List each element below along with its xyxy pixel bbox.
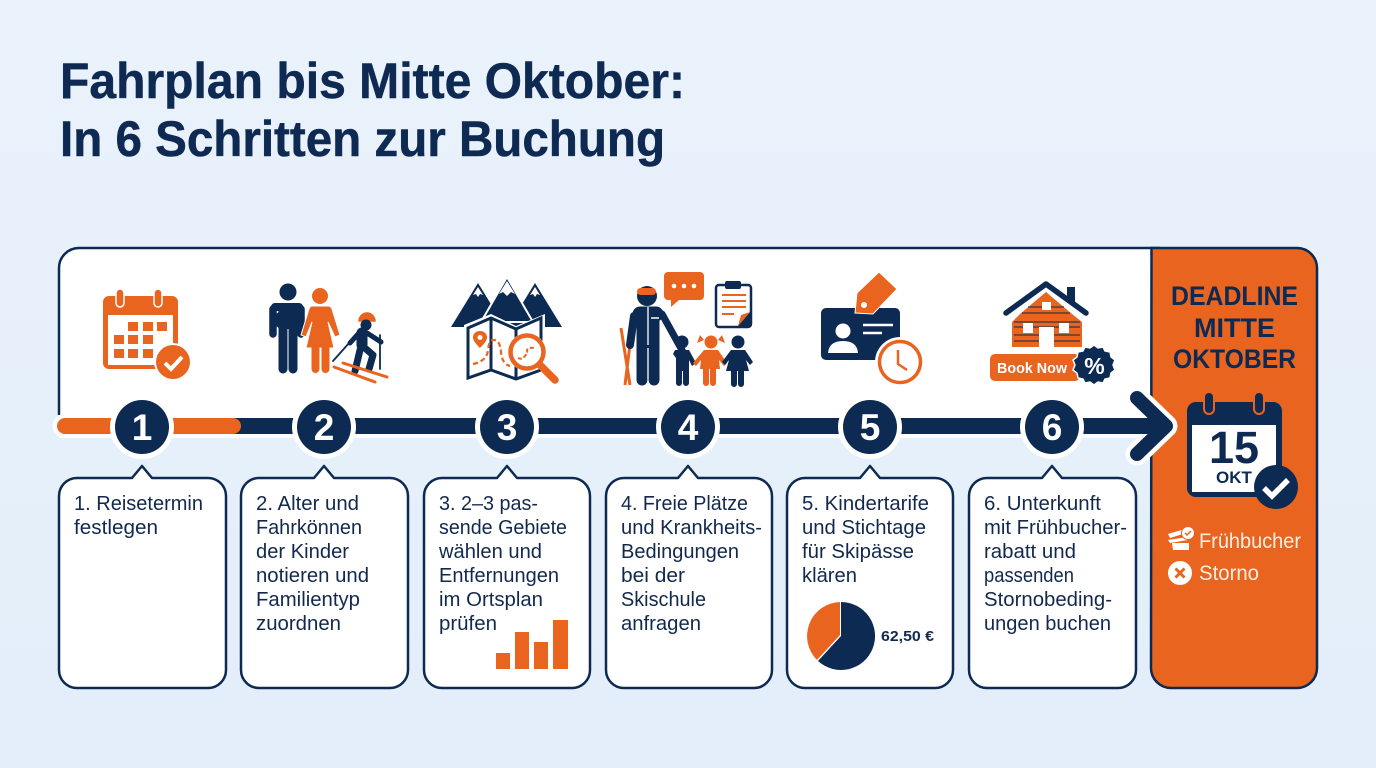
text: step 2: 2. Alter und bbox=[256, 493, 359, 515]
title: Fahrplan bis Mitte Oktober: bbox=[60, 53, 685, 109]
marker 2 bbox=[292, 395, 356, 459]
deadline heading: DEADLINE bbox=[1171, 281, 1298, 311]
icon: early booking bbox=[1168, 526, 1194, 550]
chart: pie bbox=[807, 602, 935, 670]
title: In 6 Schritten zur Buchung bbox=[60, 111, 665, 167]
text: step 2: Familientyp bbox=[256, 589, 360, 611]
text: step 6 bbox=[984, 493, 1127, 635]
text: step 2: der Kinder bbox=[256, 541, 349, 563]
text: step 4: 4. Freie Plätze bbox=[621, 493, 748, 515]
text: step 1: 1. Reisetermin bbox=[74, 493, 203, 515]
text: step 5 bbox=[802, 493, 929, 587]
marker 4: 4 bbox=[678, 407, 699, 448]
icon: ID card, price tag and clock bbox=[821, 272, 925, 387]
text: step 3 bbox=[438, 493, 567, 635]
deadline heading: OKTOBER bbox=[1173, 344, 1296, 374]
text: step 6: Stornobeding- bbox=[984, 589, 1112, 611]
text: step 3: im Ortsplan bbox=[439, 589, 543, 611]
marker 5 bbox=[838, 395, 902, 459]
text: step 5: und Stichtage bbox=[802, 517, 926, 539]
icon: log cabin with booking badge bbox=[990, 284, 1115, 385]
marker 1 bbox=[110, 395, 174, 459]
text: step 3: sende Gebiete bbox=[439, 517, 567, 539]
text: step 3: 3. 2–3 pas- bbox=[439, 493, 538, 515]
text: step 4: Bedingungen bbox=[621, 541, 739, 563]
text: step 4: Skischule bbox=[621, 589, 706, 611]
text: step 4: bei der bbox=[621, 565, 685, 587]
text: step 5: klären bbox=[802, 565, 857, 587]
icon: deadline calendar: 15 bbox=[1209, 422, 1259, 473]
text: step 6: rabatt und bbox=[984, 541, 1076, 563]
label: Frühbucher: Frühbucher bbox=[1199, 530, 1301, 553]
text: step 5: 5. Kindertarife bbox=[802, 493, 929, 515]
button label: Book Now bbox=[997, 361, 1068, 377]
text: step 6: ungen buchen bbox=[984, 613, 1111, 635]
marker 3: 3 bbox=[497, 407, 517, 448]
marker 1: 1 bbox=[132, 407, 152, 448]
card 6 bbox=[969, 466, 1136, 688]
text: step 4: anfragen bbox=[621, 613, 701, 635]
text: step 2 bbox=[256, 493, 369, 635]
marker 6 bbox=[1020, 395, 1084, 459]
panel: timeline top bbox=[59, 248, 1160, 438]
chart: bars bbox=[496, 620, 568, 669]
icon: calendar with check bbox=[103, 289, 192, 381]
card 4 bbox=[606, 466, 772, 688]
badge percent: % bbox=[1084, 353, 1105, 379]
text: step 4: und Krankheits- bbox=[621, 517, 762, 539]
title bbox=[60, 53, 685, 167]
icon: cancellation bbox=[1168, 561, 1192, 585]
text: step 6: passenden bbox=[984, 565, 1074, 587]
timeline arrow bbox=[64, 398, 1166, 454]
text: step 1: festlegen bbox=[74, 517, 158, 539]
icon: mountains and map bbox=[451, 277, 562, 384]
marker 6: 6 bbox=[1042, 407, 1062, 448]
card 3 bbox=[424, 466, 590, 688]
deadline heading: MITTE bbox=[1194, 313, 1275, 343]
label: Storno: Storno bbox=[1199, 562, 1259, 585]
cards bbox=[59, 466, 1136, 688]
marker 5: 5 bbox=[860, 407, 880, 448]
step markers bbox=[110, 395, 1084, 459]
marker 4 bbox=[656, 395, 720, 459]
icon: deadline calendar bbox=[1187, 392, 1298, 509]
text: step 4 bbox=[621, 493, 762, 635]
deadline heading bbox=[1171, 281, 1298, 374]
text: step 2: notieren und bbox=[256, 565, 369, 587]
text: step 3: prüfen bbox=[439, 613, 497, 635]
pie value: 62,50 € bbox=[881, 628, 935, 645]
icon: ski instructor with children bbox=[621, 272, 753, 387]
text: step 3: Entfernungen bbox=[439, 565, 559, 587]
text: step 6: mit Frühbucher- bbox=[984, 517, 1127, 539]
text: step 1 bbox=[74, 493, 203, 539]
card 2 bbox=[241, 466, 408, 688]
marker 3 bbox=[475, 395, 539, 459]
text: step 2: Fahrkönnen bbox=[256, 517, 362, 539]
text: step 6: 6. Unterkunft bbox=[984, 493, 1101, 515]
text: step 5: für Skipässe bbox=[802, 541, 914, 563]
icon: deadline calendar: OKT bbox=[1216, 468, 1253, 487]
card 1 bbox=[59, 466, 226, 688]
icon: family with skiing child bbox=[273, 284, 387, 382]
panel: deadline bbox=[1151, 248, 1317, 688]
card 5 bbox=[787, 466, 953, 688]
text: step 3: wählen und bbox=[438, 541, 542, 563]
marker 2: 2 bbox=[314, 407, 334, 448]
text: step 2: zuordnen bbox=[256, 613, 341, 635]
